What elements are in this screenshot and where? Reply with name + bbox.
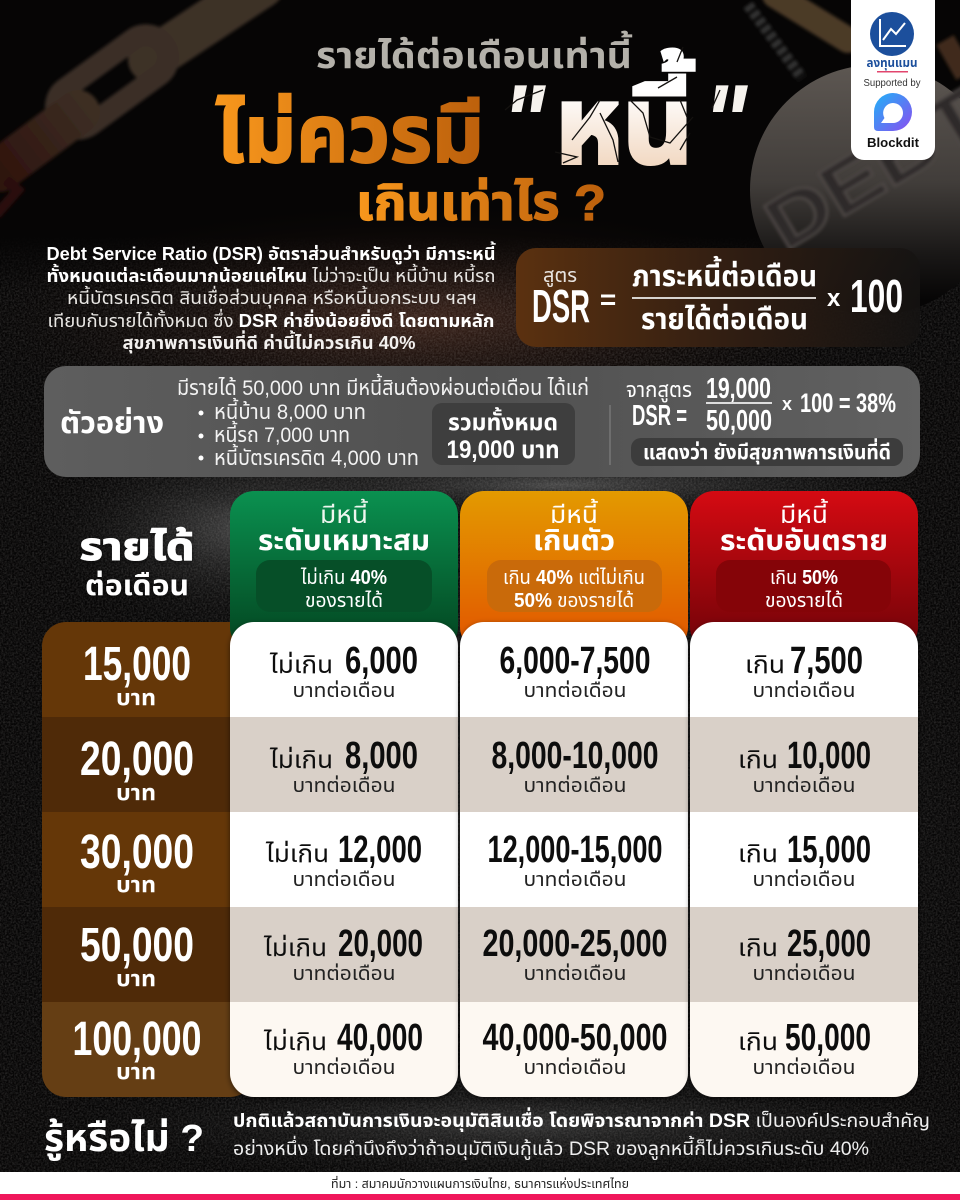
chain left: [0, 0, 262, 215]
table: red column: บาทต่อเดือน: [752, 679, 856, 702]
column: red header: เกิน 50%: [770, 567, 838, 589]
table: orange column: 8,000-10,000: [492, 735, 658, 777]
table: red column: เกิน: [738, 934, 778, 962]
wrecking ball: DEBT: [752, 74, 960, 266]
debt word with cracks: ": [502, 62, 546, 182]
icon: logo circle: [870, 12, 914, 56]
panel: income column: บาท: [116, 780, 156, 805]
footer source: ที่มา : สมาคมนักวางแผนการเงินไทย, ธนาคารแห่งประเทศไทย: [331, 1175, 629, 1191]
icon: blockdit: [874, 93, 912, 131]
income heading: [80, 527, 194, 601]
table: green column: บาทต่อเดือน: [292, 774, 396, 797]
table: green column: ไม่เกิน: [269, 651, 333, 679]
table: green column: [230, 622, 458, 1097]
table: red column: [690, 622, 918, 1097]
table: orange column: [460, 622, 688, 1097]
column: orange header: 50% ของรายได้: [514, 589, 634, 612]
table: green column: ไม่เกิน: [263, 1028, 327, 1056]
example formula: 19,000: [706, 373, 771, 405]
table: orange column: 20,000-25,000: [482, 923, 668, 965]
table: green column: ไม่เกิน: [265, 840, 329, 868]
example text: หนี้บ้าน 8,000 บาท: [214, 397, 366, 424]
example heading: ตัวอย่าง: [60, 407, 164, 440]
intro paragraph: Debt Service Ratio (DSR) อัตราส่วนสำหรับดูว่า มีภาระหนี้: [46, 241, 496, 265]
table: orange column: บาทต่อเดือน: [524, 868, 626, 891]
table: orange column: 6,000-7,500: [500, 640, 650, 682]
table: orange column: บาทต่อเดือน: [524, 962, 626, 985]
table: green column: 20,000: [338, 923, 423, 965]
intro paragraph: สุขภาพการเงินที่ดี ค่านี้ไม่ควรเกิน 40%: [122, 330, 416, 354]
background: [0, 238, 960, 1172]
table: red column: เกิน: [738, 840, 778, 868]
logo card: Blockdit: [867, 135, 920, 150]
table: green column: 12,000: [338, 829, 422, 871]
table: orange column: 40,000-50,000: [482, 1017, 668, 1059]
total box: 19,000 บาท: [446, 436, 560, 464]
panel: income column: [42, 622, 254, 1097]
panel: income column: 100,000: [72, 1013, 202, 1066]
column: red header: มีหนี้: [780, 498, 828, 529]
panel: example: [44, 366, 920, 477]
intro paragraph: เทียบกับรายได้ทั้งหมด ซึ่ง DSR ค่ายิ่งน้อยยิ่งดี โดยตามหลัก: [48, 308, 494, 331]
logo card: [851, 0, 935, 160]
did you know heading: รู้หรือไม่ ?: [44, 1118, 204, 1161]
table: orange column: บาทต่อเดือน: [524, 679, 626, 702]
total box: รวมทั้งหมด: [448, 407, 558, 435]
column: orange header: เกิน 40% แต่ไม่เกิน: [503, 566, 645, 589]
footer pink bar: [0, 1194, 960, 1200]
panel: DSR formula: x: [827, 285, 841, 312]
table: green column: บาทต่อเดือน: [292, 679, 396, 702]
table: green column: ไม่เกิน: [263, 934, 327, 962]
did you know text: ปกติแล้วสถาบันการเงินจะอนุมัติสินเชื่อ โดยพิจารณาจากค่า DSR เป็นองค์ประกอบสำคัญ: [233, 1107, 930, 1132]
table: red column: 7,500: [790, 640, 863, 682]
table: red column: 10,000: [787, 735, 871, 777]
table: red column: 25,000: [787, 923, 871, 965]
panel: DSR formula: 100: [850, 270, 903, 322]
income heading: ต่อเดือน: [85, 570, 189, 601]
intro paragraph: ทั้งหมดแต่ละเดือนมากน้อยแค่ไหน ไม่ว่าจะเป็น หนี้บ้าน หนี้รถ: [46, 263, 495, 286]
panel: DSR formula: DSR: [532, 280, 590, 332]
table: green column: บาทต่อเดือน: [292, 868, 396, 891]
table: red column: เกิน: [738, 1028, 778, 1056]
column: green header: ไม่เกิน 40%: [300, 566, 387, 589]
column: red header: ของรายได้: [765, 589, 843, 612]
table: red column: บาทต่อเดือน: [752, 962, 856, 985]
column: orange header: มีหนี้: [550, 498, 598, 529]
column: green header: ของรายได้: [305, 589, 383, 612]
chain right: [748, 0, 960, 78]
table: orange column: บาทต่อเดือน: [524, 774, 626, 797]
example text: มีรายได้ 50,000 บาท มีหนี้สินต้องผ่อนต่อเดือน ได้แก่: [177, 373, 589, 400]
example formula: [626, 373, 896, 437]
table: red column: 15,000: [787, 829, 871, 871]
panel: income column: บาท: [116, 872, 156, 897]
column: green header: ระดับเหมาะสม: [258, 525, 430, 556]
example text: หนี้บัตรเครดิต 4,000 บาท: [214, 443, 419, 470]
did you know text: [233, 1107, 930, 1161]
example text: [177, 373, 589, 470]
result pill: แสดงว่า ยังมีสุขภาพการเงินที่ดี: [643, 438, 891, 464]
table: green column: 40,000: [337, 1017, 423, 1059]
debt word with cracks: ": [703, 62, 748, 182]
example formula: 100 = 38%: [800, 388, 896, 418]
panel: DSR formula: สูตร: [543, 265, 577, 288]
income heading: รายได้: [80, 527, 194, 569]
table: green column: บาทต่อเดือน: [292, 962, 396, 985]
table: red column: 50,000: [785, 1017, 871, 1059]
table: green column: ไม่เกิน: [269, 746, 333, 774]
panel: income column: บาท: [116, 685, 156, 710]
example text: หนี้รถ 7,000 บาท: [214, 420, 350, 447]
table: red column: เกิน: [738, 746, 778, 774]
table: red column: บาทต่อเดือน: [752, 1056, 856, 1079]
intro paragraph: หนี้บัตรเครดิต สินเชื่อส่วนบุคคล หรือหนี้นอกระบบ ฯลฯ: [67, 285, 477, 309]
panel: income column: 30,000: [80, 826, 194, 879]
intro paragraph: [46, 241, 496, 354]
title line 3: เกินเท่าไร ?: [356, 175, 606, 231]
column: green header: [230, 491, 458, 651]
example formula: 50,000: [706, 405, 772, 437]
column: orange header: [460, 491, 688, 651]
debt word with cracks: หนี้: [555, 49, 694, 187]
panel: DSR formula: รายได้ต่อเดือน: [641, 304, 808, 336]
panel: income column: 50,000: [80, 919, 194, 972]
title: [216, 30, 748, 231]
title line 2: ไม่ควรมี: [216, 90, 484, 179]
table: red column: บาทต่อเดือน: [752, 868, 856, 891]
table: red column: เกิน: [745, 651, 785, 679]
panel: DSR formula: ภาระหนี้ต่อเดือน: [632, 255, 817, 293]
footer source: [0, 1172, 960, 1194]
table: green column: บาทต่อเดือน: [292, 1056, 396, 1079]
did you know text: อย่างหนึ่ง โดยคำนึงถึงว่าถ้าอนุมัติเงินกู้แล้ว DSR ของลูกหนี้ก็ไม่ควรเกินระดับ 40%: [233, 1135, 869, 1161]
table: red column: บาทต่อเดือน: [752, 774, 856, 797]
logo card: ลงทุนแมน: [866, 56, 918, 70]
column: green header: มีหนี้: [320, 498, 368, 529]
example formula: จากสูตร: [626, 379, 692, 403]
panel: income column: บาท: [116, 966, 156, 991]
table: orange column: 12,000-15,000: [488, 829, 662, 871]
table: green column: 8,000: [345, 735, 418, 777]
wrecking ball: [750, 65, 960, 315]
logo card: Supported by: [864, 78, 920, 89]
panel: DSR formula: =: [600, 284, 616, 315]
panel: income column: 20,000: [80, 733, 194, 786]
column: red header: [690, 491, 918, 651]
column: orange header: เกินตัว: [533, 525, 615, 556]
title line 1: รายได้ต่อเดือนเท่านี้: [316, 30, 633, 76]
table: orange column: บาทต่อเดือน: [524, 1056, 626, 1079]
debt word with cracks: [502, 47, 748, 187]
example formula: DSR =: [632, 400, 687, 432]
panel: income column: บาท: [116, 1059, 156, 1084]
panel: income column: 15,000: [83, 638, 191, 691]
example formula: x: [782, 394, 792, 414]
table: green column: 6,000: [345, 640, 418, 682]
total box: [432, 403, 575, 465]
panel: DSR formula: [516, 248, 920, 347]
column: red header: ระดับอันตราย: [720, 525, 888, 556]
